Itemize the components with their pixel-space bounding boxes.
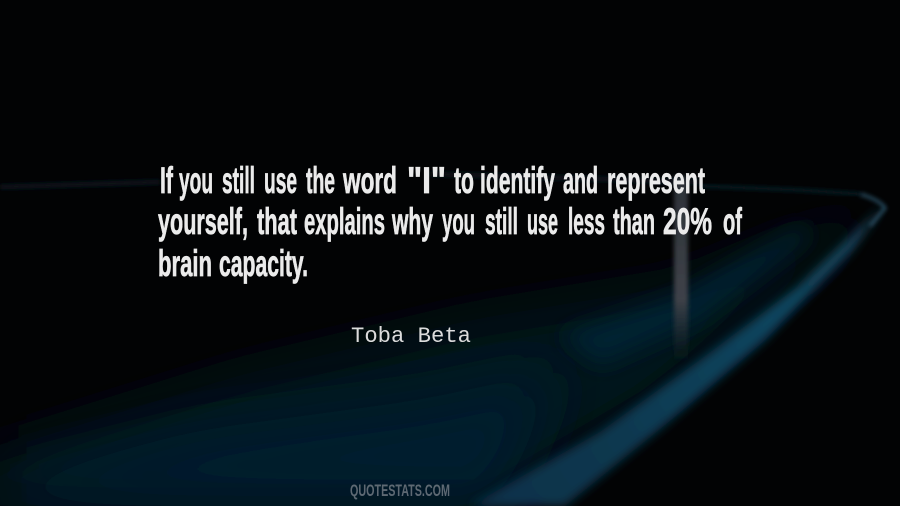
- line 2: use: [527, 201, 558, 242]
- road reflection: [674, 176, 688, 366]
- line 2: explains: [304, 201, 385, 242]
- line 2: still: [485, 201, 518, 242]
- line 1: [160, 160, 705, 201]
- line 2: yourself,: [158, 201, 248, 242]
- line 2: than: [613, 201, 655, 242]
- line 2: that: [257, 201, 297, 242]
- line 1: If: [160, 160, 173, 201]
- line 1: you: [179, 160, 213, 201]
- line 1: still: [222, 160, 255, 201]
- line 2: of: [723, 201, 742, 242]
- line 1: the: [306, 160, 335, 201]
- line 1: represent: [607, 160, 705, 201]
- line 2: less: [568, 201, 605, 242]
- line 3: brain: [158, 243, 212, 284]
- line 1: "I": [407, 160, 446, 201]
- line 3: capacity.: [219, 243, 308, 284]
- author: Toba Beta: [351, 324, 471, 349]
- line 1: use: [264, 160, 297, 201]
- line 1: and: [563, 160, 598, 201]
- line 1: identify: [480, 160, 555, 201]
- line 2: 20%: [663, 201, 712, 242]
- line 3: [158, 243, 308, 284]
- watermark: QUOTESTATS.COM: [350, 481, 450, 500]
- line 1: to: [454, 160, 474, 201]
- quote text: [158, 160, 742, 284]
- line 2: why: [391, 201, 433, 242]
- line 2: [158, 201, 742, 242]
- line 2: you: [442, 201, 475, 242]
- line 1: word: [342, 160, 397, 201]
